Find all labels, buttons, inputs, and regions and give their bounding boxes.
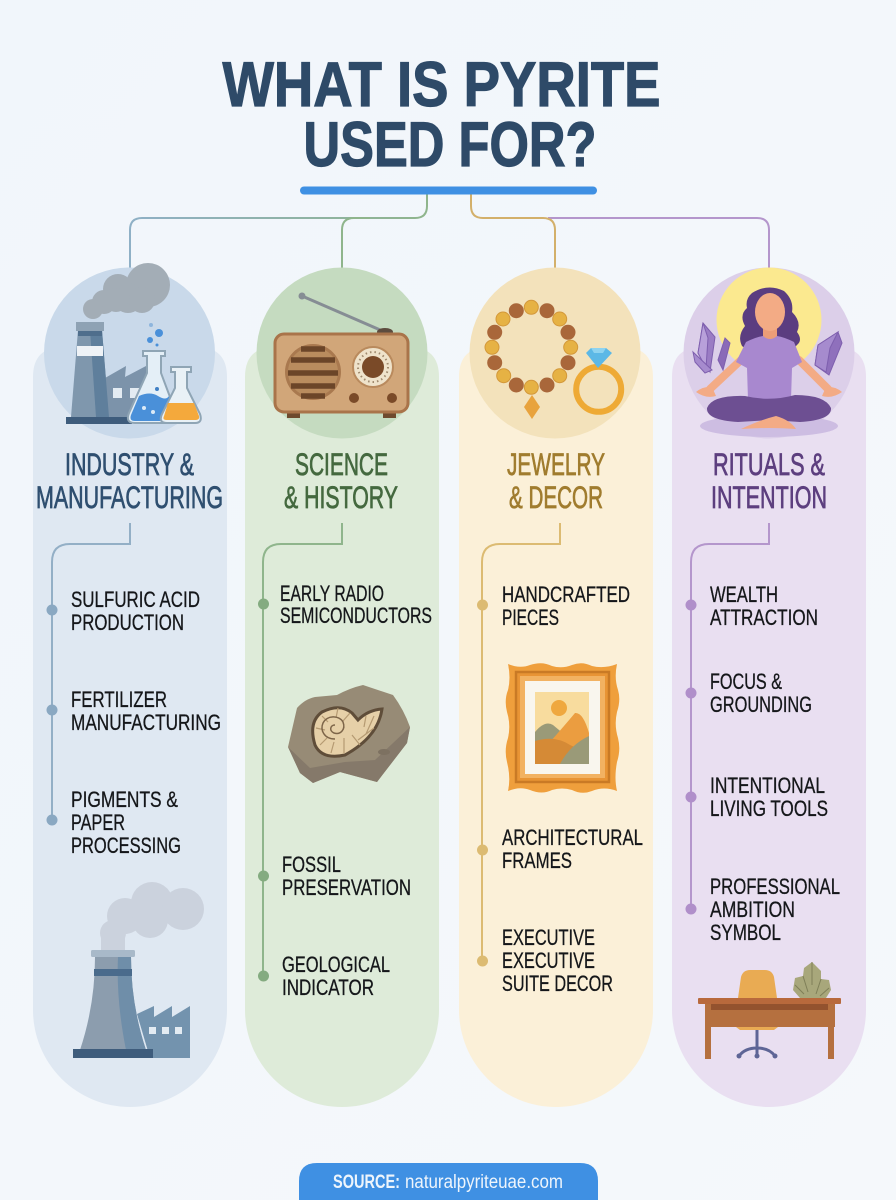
item list: PIGMENTS & <box>71 787 178 812</box>
heading: INTENTION <box>711 479 827 515</box>
title <box>222 50 660 180</box>
item list: SYMBOL <box>710 920 781 945</box>
heading: SCIENCE <box>295 446 388 482</box>
item list: PAPER <box>71 810 125 835</box>
icon: smokestack, factory and flasks <box>66 263 201 424</box>
heading: INDUSTRY & <box>65 446 194 482</box>
item list: INTENTIONAL <box>710 773 825 798</box>
item list: EXECUTIVE <box>502 925 595 950</box>
item list: MANUFACTURING <box>71 710 221 735</box>
icon: cooling tower and factory <box>73 882 204 1058</box>
item list: FOSSIL <box>282 852 341 877</box>
source badge: SOURCE: <box>333 1172 400 1193</box>
item list: GEOLOGICAL <box>282 952 390 977</box>
item list: INDICATOR <box>282 975 374 1000</box>
item list <box>71 587 221 858</box>
panel: jewelry & decor <box>459 268 653 1107</box>
icon: ornate picture frame <box>506 663 619 793</box>
item list: PROCESSING <box>71 833 181 858</box>
connector lines from title bar to the four categories <box>130 194 769 268</box>
item list: PRESERVATION <box>282 875 411 900</box>
item list: HANDCRAFTED <box>502 582 630 607</box>
heading: RITUALS & <box>713 446 825 482</box>
item list <box>280 581 432 1000</box>
item list: ARCHITECTURAL <box>502 825 643 850</box>
item list: WEALTH <box>710 582 778 607</box>
item list: AMBITION <box>710 897 795 922</box>
item list: PROFESSIONAL <box>710 874 840 899</box>
heading: MANUFACTURING <box>36 479 223 515</box>
heading <box>711 446 827 515</box>
icon: meditating woman with crystals <box>693 268 842 437</box>
item list: PIECES <box>502 605 559 630</box>
item list: PRODUCTION <box>71 610 184 635</box>
icon: vintage radio <box>275 292 408 418</box>
item list: ATTRACTION <box>710 605 818 630</box>
title underline bar <box>300 186 597 194</box>
heading: & DECOR <box>509 479 603 515</box>
timeline <box>258 523 342 982</box>
item list: EXECUTIVE <box>502 948 595 973</box>
item list <box>710 582 840 945</box>
source badge <box>299 1163 598 1200</box>
item list: LIVING TOOLS <box>710 796 828 821</box>
item list: SULFURIC ACID <box>71 587 200 612</box>
item list: FRAMES <box>502 848 572 873</box>
item list: SUITE DECOR <box>502 971 613 996</box>
panel: science & history <box>245 268 439 1107</box>
timeline <box>686 523 769 914</box>
heading <box>507 446 605 515</box>
icon: bead bracelet and diamond ring <box>485 300 621 419</box>
item list: GROUNDING <box>710 692 812 717</box>
title: WHAT IS PYRITE <box>222 50 660 120</box>
source badge: naturalpyriteuae.com <box>405 1172 563 1193</box>
icon: ammonite fossil in rock <box>288 685 410 783</box>
item list: EARLY RADIO <box>280 581 384 606</box>
title: USED FOR? <box>304 110 596 180</box>
panel: industry & manufacturing <box>33 263 227 1107</box>
item list <box>502 582 643 996</box>
icon: desk with chair and pyrite cluster <box>698 962 841 1059</box>
heading: & HISTORY <box>284 479 398 515</box>
panel: rituals & intention <box>672 268 866 1107</box>
heading: JEWELRY <box>507 446 605 482</box>
heading <box>36 446 223 515</box>
item list: SEMICONDUCTORS <box>280 603 432 628</box>
item list: FOCUS & <box>710 669 782 694</box>
heading <box>284 446 398 515</box>
timeline <box>477 523 560 966</box>
item list: FERTILIZER <box>71 687 167 712</box>
timeline <box>46 523 130 826</box>
